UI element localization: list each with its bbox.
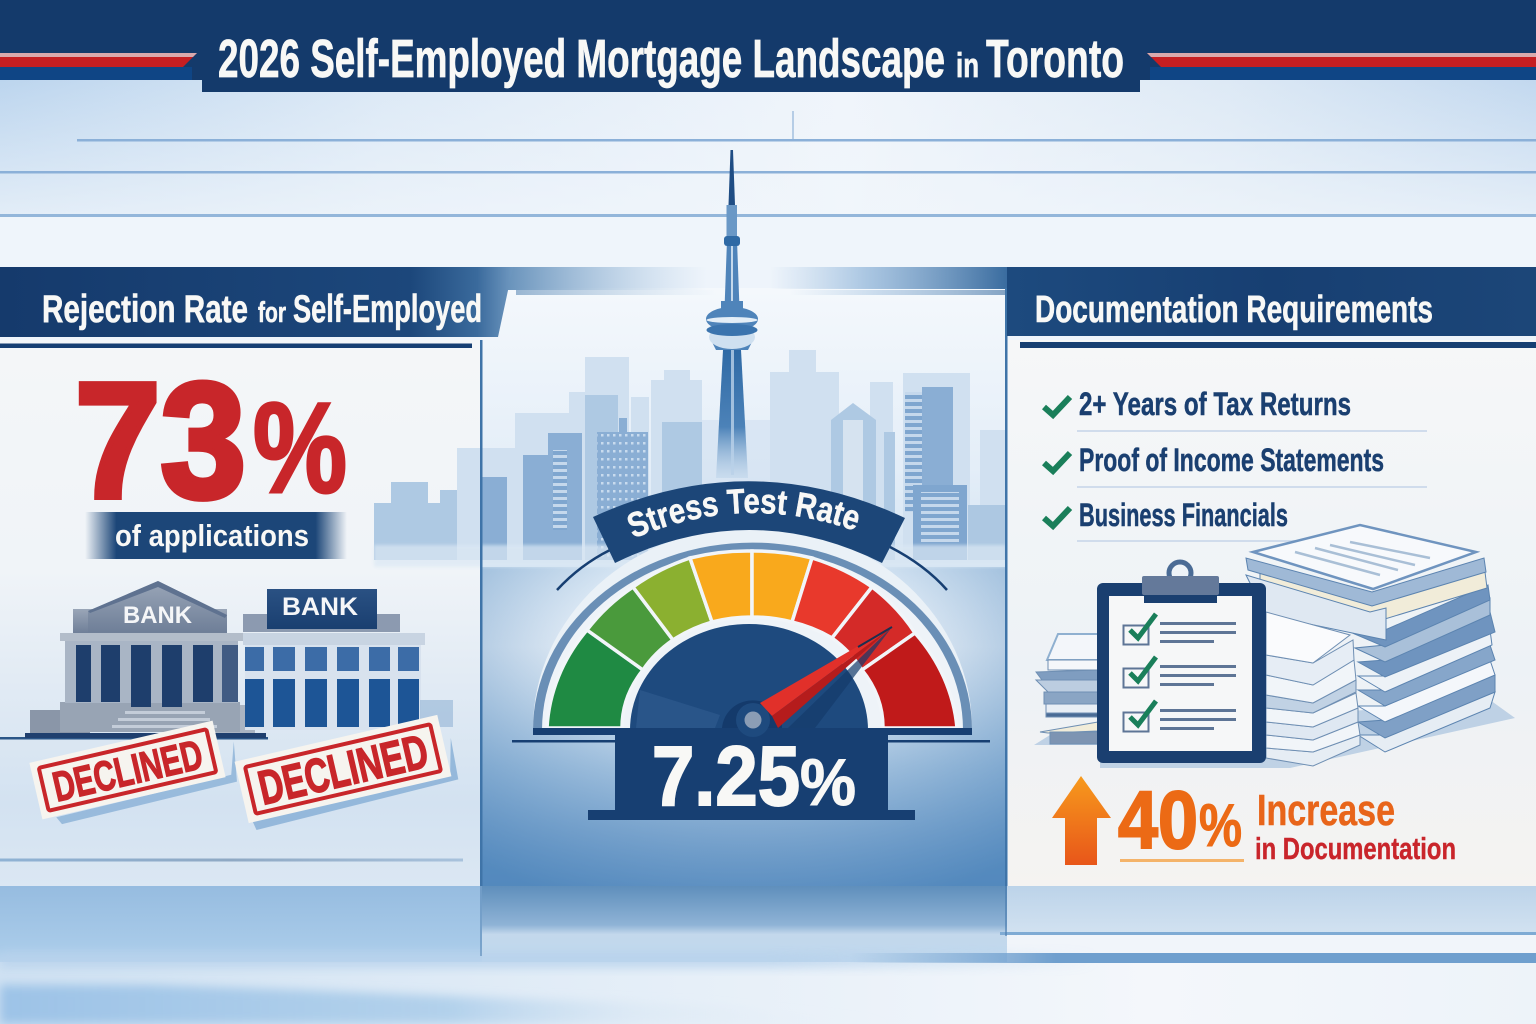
big right stack bbox=[1246, 525, 1495, 752]
gauge outer ring bbox=[533, 527, 972, 730]
heading: rejection rate: Self-Employed bbox=[293, 288, 482, 331]
right red stripe bbox=[1147, 53, 1536, 67]
panel dividers bbox=[480, 288, 1008, 886]
panel: right background bbox=[1008, 340, 1536, 886]
icon: orange up arrow bbox=[1052, 776, 1111, 865]
panel: left background bbox=[0, 340, 481, 886]
heading: documentation requirements bbox=[1007, 267, 1536, 348]
stat: 40% increase bbox=[1118, 775, 1456, 866]
checklist item: income statements bbox=[1044, 442, 1427, 488]
big stat: 73% bbox=[75, 349, 347, 532]
checklist row 2 bbox=[1124, 657, 1236, 688]
banner: stress test rate bbox=[593, 481, 905, 563]
heading: rejection rate bbox=[0, 267, 513, 348]
header band bbox=[0, 0, 1536, 92]
icon: paper stacks bbox=[1034, 525, 1515, 768]
back layer buildings bbox=[457, 350, 1005, 560]
readout: 7.25%: 7.25 bbox=[652, 729, 800, 823]
icon: modern bank: BANK bbox=[282, 593, 358, 621]
top sheet text lines bbox=[1295, 542, 1430, 575]
title: Toronto bbox=[986, 29, 1124, 89]
banner: stress test rate: Stress Test Rate bbox=[628, 488, 858, 536]
label: of applications: of applications bbox=[115, 518, 309, 553]
icon: modern bank bbox=[243, 589, 453, 730]
checklist row 3 bbox=[1124, 701, 1236, 732]
title: in bbox=[956, 47, 979, 85]
readout: 7.25%: % bbox=[800, 745, 856, 819]
checklist item: tax returns: 2+ Years of Tax Returns bbox=[1079, 386, 1351, 422]
panel: documentation requirements bbox=[1007, 267, 1536, 866]
sky band with horizontal rules bbox=[0, 80, 1536, 270]
stat: 40% increase: 40 bbox=[1118, 775, 1198, 866]
big stat: 73%: % bbox=[253, 377, 347, 520]
middle small stack bbox=[1266, 612, 1360, 766]
stamp: declined 2 bbox=[235, 713, 461, 831]
stamp: declined 1 bbox=[29, 717, 243, 828]
panel: rejection rate bbox=[0, 267, 513, 862]
front layer buildings bbox=[482, 387, 1005, 560]
title: 2026 Self-Employed Mortgage Landscape bbox=[218, 29, 945, 89]
gauge dial bbox=[630, 624, 868, 730]
stat: 40% increase: Increase bbox=[1257, 786, 1395, 835]
checklist item: tax returns bbox=[1044, 386, 1427, 432]
Toronto skyline bbox=[374, 350, 1006, 567]
checklist item: business financials bbox=[1044, 497, 1337, 542]
gauge coloured segments bbox=[547, 551, 957, 728]
gauge wings bbox=[557, 547, 947, 590]
stat: 40% increase: in Documentation bbox=[1255, 831, 1456, 866]
stamp: declined 1: DECLINED bbox=[48, 730, 207, 810]
CN Tower bbox=[706, 150, 758, 478]
checklist item: business financials: Business Financials bbox=[1079, 497, 1288, 533]
heading: rejection rate: for bbox=[258, 297, 286, 329]
big stat: 73%: 73 bbox=[75, 349, 246, 532]
waterfront base bbox=[0, 886, 1536, 1024]
middle layer buildings bbox=[374, 395, 895, 560]
panel: stress test gauge bbox=[512, 481, 990, 823]
water edge haze bbox=[374, 545, 1006, 567]
left small stack bbox=[1036, 634, 1098, 744]
icon: classic bank bbox=[0, 581, 268, 740]
gauge needle bbox=[722, 627, 892, 737]
heading: rejection rate: Rejection Rate bbox=[42, 288, 248, 331]
icon: classic bank: BANK bbox=[123, 602, 193, 629]
checklist row 1 bbox=[1124, 614, 1236, 644]
stamp: declined 2: DECLINED bbox=[254, 725, 433, 816]
icon: clipboard bbox=[1097, 562, 1266, 763]
label: of applications bbox=[85, 512, 347, 559]
panel: center background bbox=[482, 267, 1007, 886]
checklist item: income statements: Proof of Income Statements bbox=[1079, 442, 1384, 478]
left red stripe bbox=[0, 53, 197, 67]
readout: 7.25% bbox=[512, 728, 990, 823]
stat: 40% increase: % bbox=[1199, 792, 1242, 859]
